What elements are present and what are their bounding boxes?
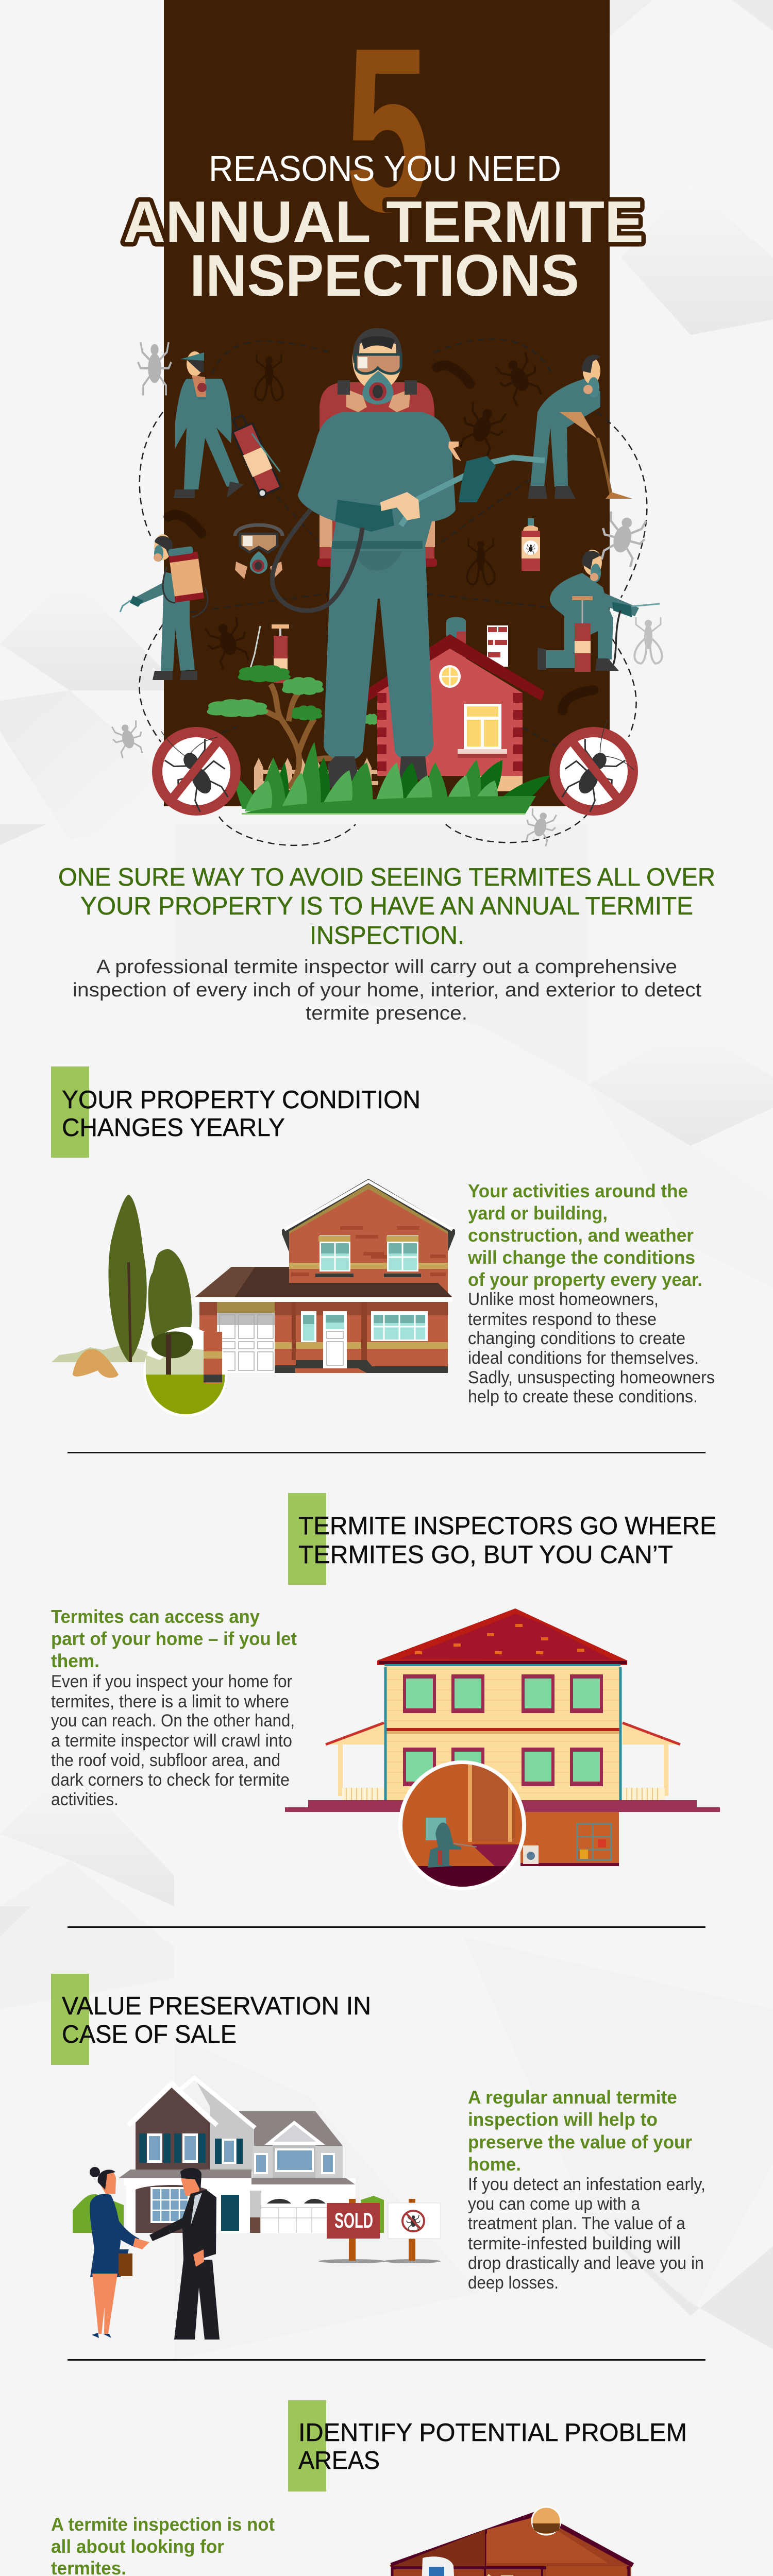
sold sign xyxy=(318,2199,441,2263)
heading: YOUR PROPERTY CONDITION xyxy=(62,1086,421,1114)
body text: Even if you inspect your home for xyxy=(51,1672,292,1691)
illustration: two-storey house xyxy=(285,1608,720,1891)
body text: changing conditions to create xyxy=(468,1329,685,1348)
panel: section 3 xyxy=(51,1974,705,2340)
termite spot circles xyxy=(532,2507,561,2535)
body text: deep losses. xyxy=(468,2273,559,2293)
green text: all about looking for xyxy=(51,2536,224,2557)
heading: CASE OF SALE xyxy=(62,2021,237,2048)
intro paragraph xyxy=(73,956,701,1024)
worker: top left xyxy=(174,351,286,498)
green text: of your property every year. xyxy=(468,1269,702,1290)
green text: construction, and weather xyxy=(468,1225,694,1246)
intro paragraph: termite presence. xyxy=(306,1003,467,1024)
illustration: cutaway house and inspector xyxy=(323,2507,685,2576)
panel: section 4 xyxy=(51,2400,687,2576)
head xyxy=(352,329,402,391)
green text: A regular annual termite xyxy=(468,2087,677,2108)
body text: ideal conditions for themselves. xyxy=(468,1348,699,1368)
body text: treatment plan. The value of a xyxy=(468,2214,685,2233)
illustration: brick house xyxy=(52,1179,455,1415)
green text: Your activities around the xyxy=(468,1180,688,1201)
illustration: house with buyers and sold sign xyxy=(73,2078,441,2340)
body text: termites respond to these xyxy=(468,1310,657,1329)
green accent block xyxy=(288,2400,326,2492)
body text: drop drastically and leave you in xyxy=(468,2253,704,2273)
illustration: bonsai tree and fence xyxy=(207,665,379,790)
worker: mid left xyxy=(120,534,208,680)
shoes xyxy=(328,756,428,788)
hero background panel xyxy=(164,0,610,806)
green accent block xyxy=(51,1974,89,2065)
intro paragraph: inspection of every inch of your home, interior, and exterior to detect xyxy=(73,979,701,1001)
intro heading: ONE SURE WAY TO AVOID SEEING TERMITES ALL OVER xyxy=(58,863,715,891)
legs xyxy=(324,546,433,761)
title line 1: ANNUAL TERMITE xyxy=(123,190,644,255)
spray wand xyxy=(401,457,545,526)
body text: termite-infested building will xyxy=(468,2234,681,2253)
icon: no termites left xyxy=(149,709,245,817)
green text xyxy=(51,1606,297,1671)
green text: them. xyxy=(51,1650,99,1671)
icon: gas mask xyxy=(235,525,282,579)
intro xyxy=(58,863,715,1024)
green text: Termites can access any xyxy=(51,1606,260,1627)
icon: pump sprayer xyxy=(248,624,289,683)
intro heading: INSPECTION. xyxy=(310,922,464,950)
panel: section 2 xyxy=(51,1493,720,1891)
green accent block xyxy=(51,1066,89,1158)
sold sign: SOLD xyxy=(334,2208,373,2232)
green text: preserve the value of your xyxy=(468,2131,692,2153)
heading: CHANGES YEARLY xyxy=(62,1114,285,1142)
upper storey xyxy=(282,1179,455,1288)
green text: home. xyxy=(468,2154,521,2175)
body text: If you detect an infestation early, xyxy=(468,2175,705,2194)
lower storey xyxy=(199,1302,448,1373)
illustration: red house xyxy=(365,617,545,791)
title xyxy=(123,148,644,309)
green text xyxy=(51,2514,275,2576)
inspector xyxy=(422,2556,455,2576)
green text: will change the conditions xyxy=(467,1247,695,1268)
green text xyxy=(468,2087,692,2175)
body text xyxy=(468,2175,705,2293)
man xyxy=(149,2168,220,2340)
intro heading xyxy=(58,863,715,950)
hose xyxy=(272,510,362,611)
body text: help to create these conditions. xyxy=(468,1387,698,1406)
heading xyxy=(62,1992,371,2048)
green text xyxy=(467,1180,702,1290)
body text: Sadly, unsuspecting homeowners xyxy=(468,1368,715,1387)
heading: AREAS xyxy=(298,2447,380,2475)
body text xyxy=(51,1672,295,1809)
body text xyxy=(468,1290,715,1406)
panel: section 1 xyxy=(51,1066,715,1415)
heading: TERMITES GO, BUT YOU CAN’T xyxy=(298,1541,673,1569)
body text: termites, there is a limit to where xyxy=(51,1692,289,1711)
body text: Unlike most homeowners, xyxy=(468,1290,659,1309)
heading: TERMITE INSPECTORS GO WHERE xyxy=(298,1512,716,1540)
heading: IDENTIFY POTENTIAL PROBLEM xyxy=(298,2419,687,2447)
intro heading: YOUR PROPERTY IS TO HAVE AN ANNUAL TERMITE xyxy=(80,892,693,920)
body text: you can reach. On the other hand, xyxy=(51,1711,295,1731)
worker: top right xyxy=(528,355,632,499)
panel: hero xyxy=(110,0,662,848)
hand xyxy=(380,492,420,520)
torso xyxy=(298,412,456,546)
body text: a termite inspector will crawl into xyxy=(51,1731,292,1751)
green text: part of your home – if you let xyxy=(51,1628,297,1649)
big number 5: 5 xyxy=(345,0,430,261)
porch roof xyxy=(195,1267,452,1297)
green text: yard or building, xyxy=(468,1202,608,1224)
body text: activities. xyxy=(51,1790,119,1809)
heading: VALUE PRESERVATION IN xyxy=(62,1992,371,2020)
magnifier circle xyxy=(145,1329,226,1415)
subtitle line: REASONS YOU NEED xyxy=(209,148,561,189)
woman xyxy=(90,2167,149,2338)
title line 2: INSPECTIONS xyxy=(190,243,579,309)
faint pests xyxy=(110,342,662,848)
body text: the roof void, subfloor area, and xyxy=(51,1751,280,1770)
green text: A termite inspection is not xyxy=(51,2514,275,2535)
heading xyxy=(298,2419,687,2475)
heading xyxy=(62,1086,421,1142)
illustration: grass xyxy=(232,742,550,815)
body text: you can come up with a xyxy=(468,2194,640,2214)
intro paragraph: A professional termite inspector will carry out a comprehensive xyxy=(96,956,677,978)
illustration: inspector with sprayer xyxy=(272,328,545,788)
icon: spray can xyxy=(522,518,540,571)
worker: mid right kneeling xyxy=(537,550,660,672)
green accent block xyxy=(288,1493,326,1585)
body text: dark corners to check for termite xyxy=(51,1770,290,1790)
backpack tank xyxy=(320,382,434,566)
heading xyxy=(298,1512,716,1569)
icon: no termites right xyxy=(553,713,649,821)
green text: inspection will help to xyxy=(468,2109,658,2130)
dashed outline curves xyxy=(139,339,647,845)
